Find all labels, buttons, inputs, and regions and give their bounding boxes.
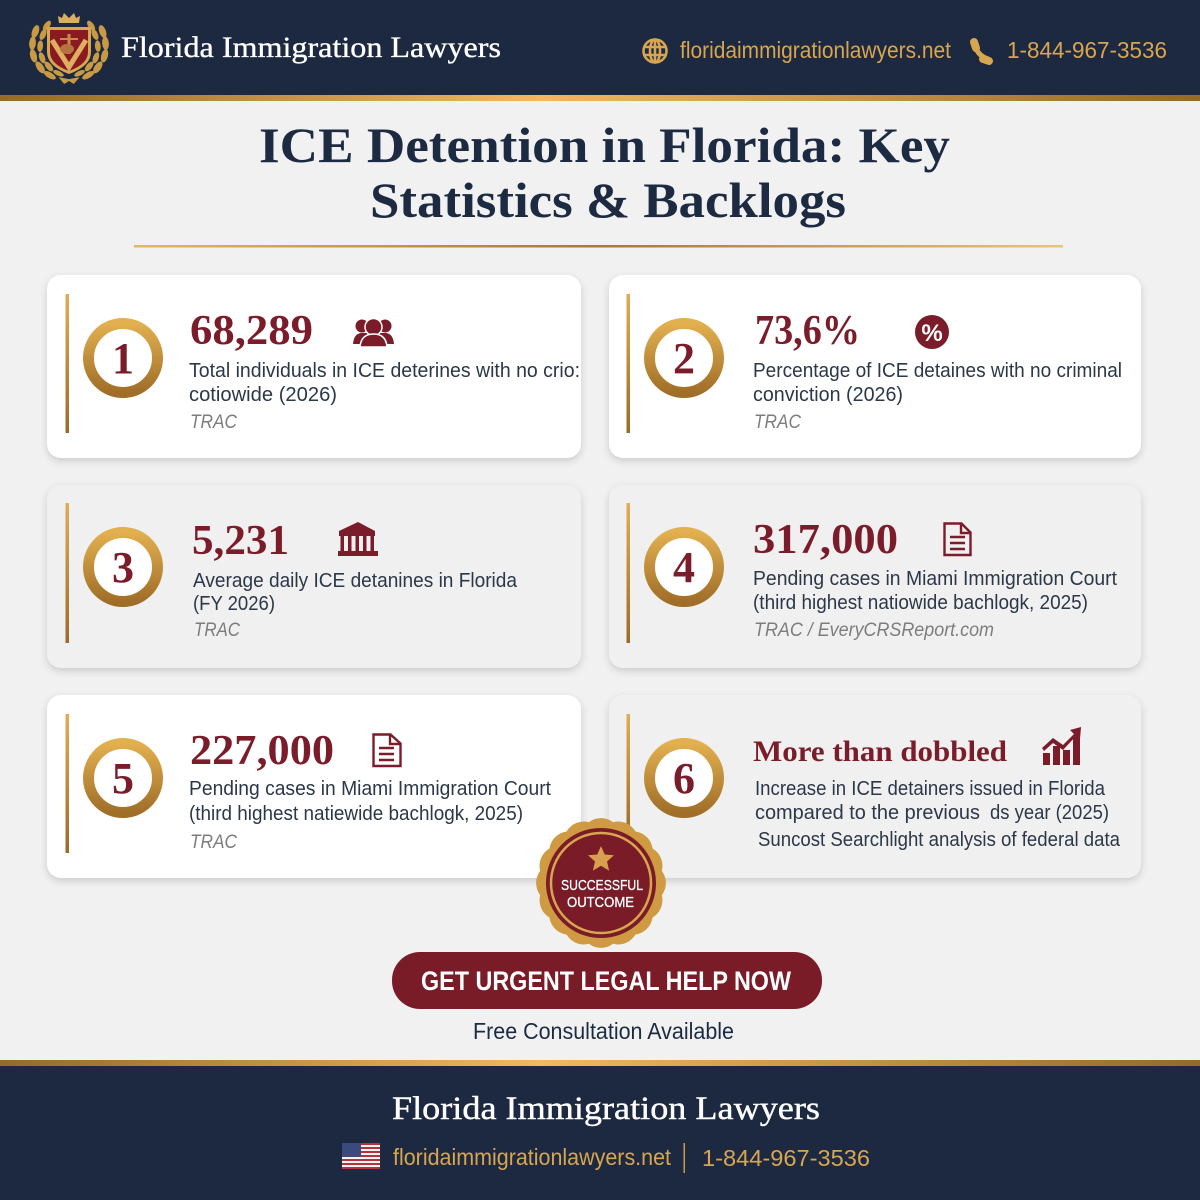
consultation note: Free Consultation Available [473, 1018, 734, 1044]
number badge 5 [88, 744, 158, 812]
call to action button [392, 952, 822, 1009]
panel: stat 4 [609, 485, 1141, 668]
icon: courthouse [338, 522, 378, 556]
description 3: Average daily ICE detanines in Florida [193, 570, 518, 592]
firm name: Florida Immigration Lawyers [121, 31, 501, 64]
description 6: ds year (2025) [990, 802, 1109, 824]
description 6: Increase in ICE detainers issued in Florida [755, 778, 1106, 800]
description 6: compared to the previous [755, 802, 980, 824]
number badge 4 [650, 532, 718, 602]
description 2: Percentage of ICE detaines with no criminal [753, 360, 1122, 382]
stat value 3: 5,231 [192, 518, 289, 564]
number badge 1 [88, 324, 158, 392]
description 5: (third highest natiewide bachlogk, 2025) [189, 803, 523, 825]
source 2: TRAC [754, 412, 801, 433]
panel: stat 6 [609, 695, 1141, 878]
number badge 6: 6 [673, 754, 695, 803]
stat value 1: 68,289 [190, 308, 313, 354]
footer phone: 1-844-967-3536 [702, 1145, 870, 1171]
seal: successful outcome: SUCCESSFUL [561, 877, 643, 894]
logo crest [28, 13, 110, 84]
source 1: TRAC [190, 412, 237, 433]
title: Statistics & Backlogs [370, 172, 846, 228]
icon: globe [644, 39, 666, 63]
panel: stat 2 [609, 275, 1141, 458]
number badge 1: 1 [112, 334, 134, 383]
icon: US flag [342, 1143, 380, 1169]
icon: document [944, 524, 970, 555]
source 4: TRAC / EveryCRSReport.com [754, 620, 994, 641]
number badge 3: 3 [112, 543, 134, 592]
description 5: Pending cases in Miami Immigration Court [189, 778, 551, 800]
source 6: Suncost Searchlight analysis of federal data [758, 829, 1121, 851]
icon: rising chart [1042, 727, 1081, 765]
source 5: TRAC [190, 832, 237, 853]
icon: percent: % [921, 320, 943, 347]
website: floridaimmigrationlawyers.net [680, 37, 952, 63]
panel: stat 3 [47, 485, 581, 668]
header band [0, 0, 1200, 101]
panel: stat 5 [47, 695, 581, 878]
icon: percent [915, 315, 949, 349]
number badge 6 [650, 744, 718, 812]
phone number: 1-844-967-3536 [1007, 37, 1167, 63]
stat value 2: 73,6% [755, 308, 860, 354]
panel: stat 1 [47, 275, 581, 458]
description 4: (third highest natiowide bachlogk, 2025) [753, 592, 1088, 614]
footer website: floridaimmigrationlawyers.net [393, 1144, 672, 1170]
title [259, 117, 950, 228]
description 2 [753, 360, 1122, 406]
description 1: Total individuals in ICE deterines with no crio: [189, 360, 580, 382]
number badge 5: 5 [112, 754, 134, 803]
icon: document [374, 734, 400, 766]
call to action button: GET URGENT LEGAL HELP NOW [421, 966, 791, 996]
description 4: Pending cases in Miami Immigration Court [753, 568, 1117, 590]
description 2: conviction (2026) [753, 384, 903, 406]
description 5 [189, 778, 551, 825]
seal: successful outcome [526, 808, 676, 958]
number badge 3 [88, 532, 158, 602]
number badge 2: 2 [673, 334, 695, 383]
icon: people [353, 318, 394, 347]
number badge 4: 4 [673, 543, 695, 592]
description 1 [189, 360, 580, 406]
description 6 [755, 778, 1109, 824]
description 3 [193, 570, 518, 615]
description 4 [753, 568, 1117, 614]
footer firm name: Florida Immigration Lawyers [392, 1091, 820, 1127]
stat value 6: More than dobbled [753, 735, 1007, 768]
description 1: cotiowide (2026) [189, 384, 337, 406]
stat value 4: 317,000 [753, 517, 898, 563]
icon: phone [974, 42, 989, 61]
source 3: TRAC [194, 620, 240, 641]
title: ICE Detention in Florida: Key [259, 117, 950, 173]
seal: successful outcome: OUTCOME [567, 894, 634, 911]
description 3: (FY 2026) [193, 593, 275, 615]
number badge 2 [650, 324, 718, 392]
footer band [0, 1060, 1200, 1200]
stat value 5: 227,000 [190, 728, 334, 774]
